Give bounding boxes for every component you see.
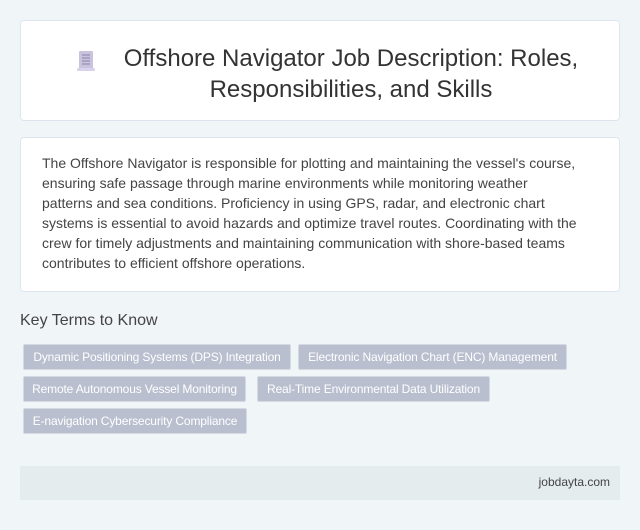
tag 5 [23,408,247,434]
header card [20,20,620,121]
title: Offshore Navigator Job Description: Roles, Responsibilities, and Skills [124,45,578,103]
footer [20,466,620,500]
tag 4 [257,376,490,402]
tag 1 [23,344,291,370]
tag 2: Electronic Navigation Chart (ENC) Management [308,350,557,364]
tag 1: Dynamic Positioning Systems (DPS) Integration [33,350,281,364]
heading: key terms: Key Terms to Know [20,312,158,329]
tag 3: Remote Autonomous Vessel Monitoring [32,382,237,396]
tag 3 [23,376,246,402]
icon: document [77,51,95,71]
tag 5: E-navigation Cybersecurity Compliance [33,414,237,428]
tag 2 [298,344,567,370]
tag 4: Real-Time Environmental Data Utilization [267,382,480,396]
description text: The Offshore Navigator is responsible for plotting and maintaining the vessel's course, ensuring safe passage through marine environments while monitoring weather patterns and sea conditions. Proficiency in using GPS, radar, and electronic chart systems is essential to avoid hazards and optimize travel routes. Coordinating with the crew for timely adjustments and maintaining communication with shore-based teams contributes to efficient offshore operations. [42,155,577,271]
footer text: jobdayta.com [539,475,610,489]
description card [20,137,620,292]
